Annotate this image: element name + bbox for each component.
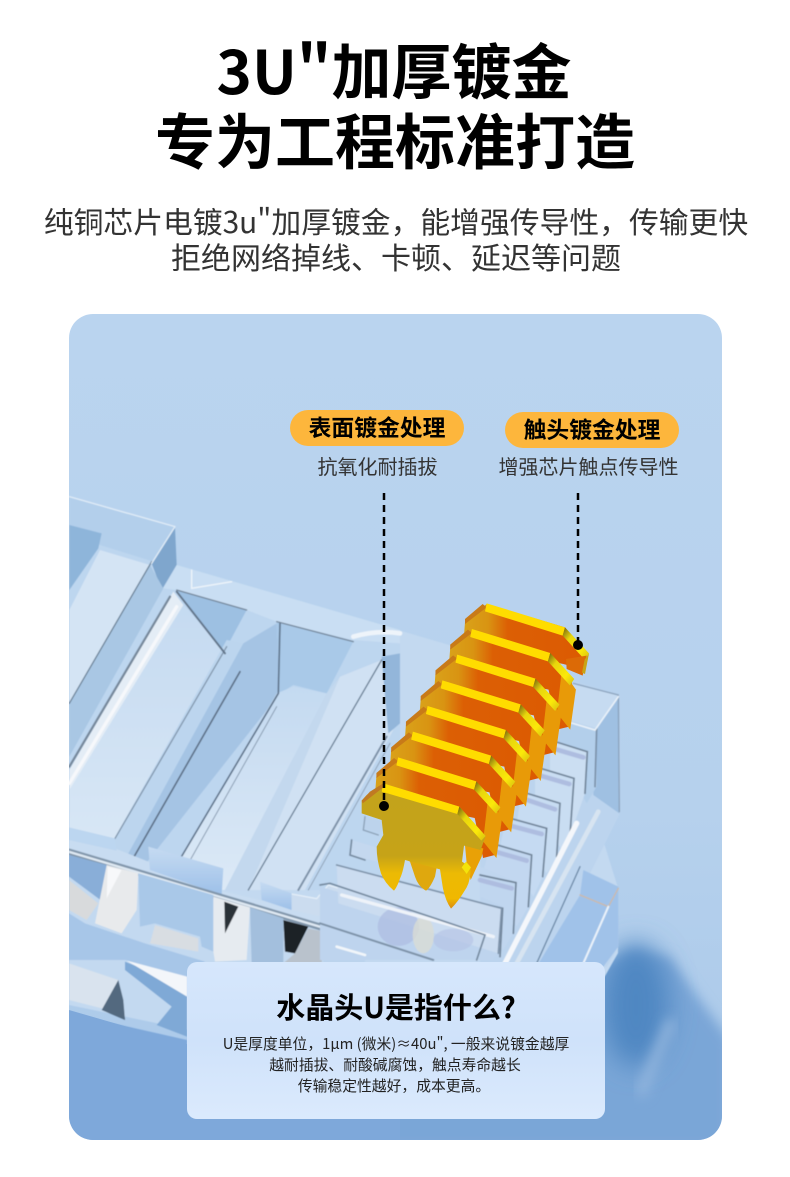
callout body: U是厚度单位，1μm (微米)≈40u", 一般来说镀金越厚 <box>223 1033 570 1054</box>
title: 专为工程标准打造 <box>155 95 635 182</box>
panel: product photo <box>69 314 730 1150</box>
connector centre bottom fins <box>320 817 502 960</box>
callout body <box>223 1033 570 1096</box>
connector bottom left metal contacts <box>69 828 338 1044</box>
connector left and top surfaces <box>69 497 400 890</box>
callout body: 越耐插拔、耐酸碱腐蚀，触点寿命越长 <box>269 1054 521 1075</box>
body base <box>69 632 618 1029</box>
front blade with legs <box>362 783 486 909</box>
title <box>155 25 635 182</box>
callout heading: 水晶头U是指什么? <box>276 985 516 1027</box>
label: surface plating <box>290 410 464 480</box>
title: 3U"加厚镀金 <box>217 25 571 112</box>
subtitle text: 拒绝网络掉线、卡顿、延迟等问题 <box>171 234 621 278</box>
leader line: contact plating <box>573 493 583 650</box>
leader line: surface plating <box>379 493 389 811</box>
callout card <box>187 962 605 1119</box>
lower base under main ridge <box>69 877 86 891</box>
blades 7 to 2 <box>375 629 576 858</box>
background shadow shape <box>69 943 730 1150</box>
label: surface plating: 抗氧化耐插拔 <box>318 451 438 480</box>
subtitle text <box>44 198 748 278</box>
subtitle text: 纯铜芯片电镀3u"加厚镀金，能增强传导性，传输更快 <box>44 198 748 242</box>
label: contact plating <box>498 412 679 480</box>
connector right side fins <box>480 680 620 967</box>
gold contact blades <box>362 603 589 909</box>
callout body: 传输稳定性越好，成本更高。 <box>298 1075 490 1096</box>
crystal connector body <box>69 497 620 1050</box>
label: contact plating: 增强芯片触点传导性 <box>498 451 678 480</box>
blade 8 with hook <box>463 603 589 676</box>
pill: surface plating: 表面镀金处理 <box>309 410 446 443</box>
pill: contact plating: 触头镀金处理 <box>524 412 661 445</box>
